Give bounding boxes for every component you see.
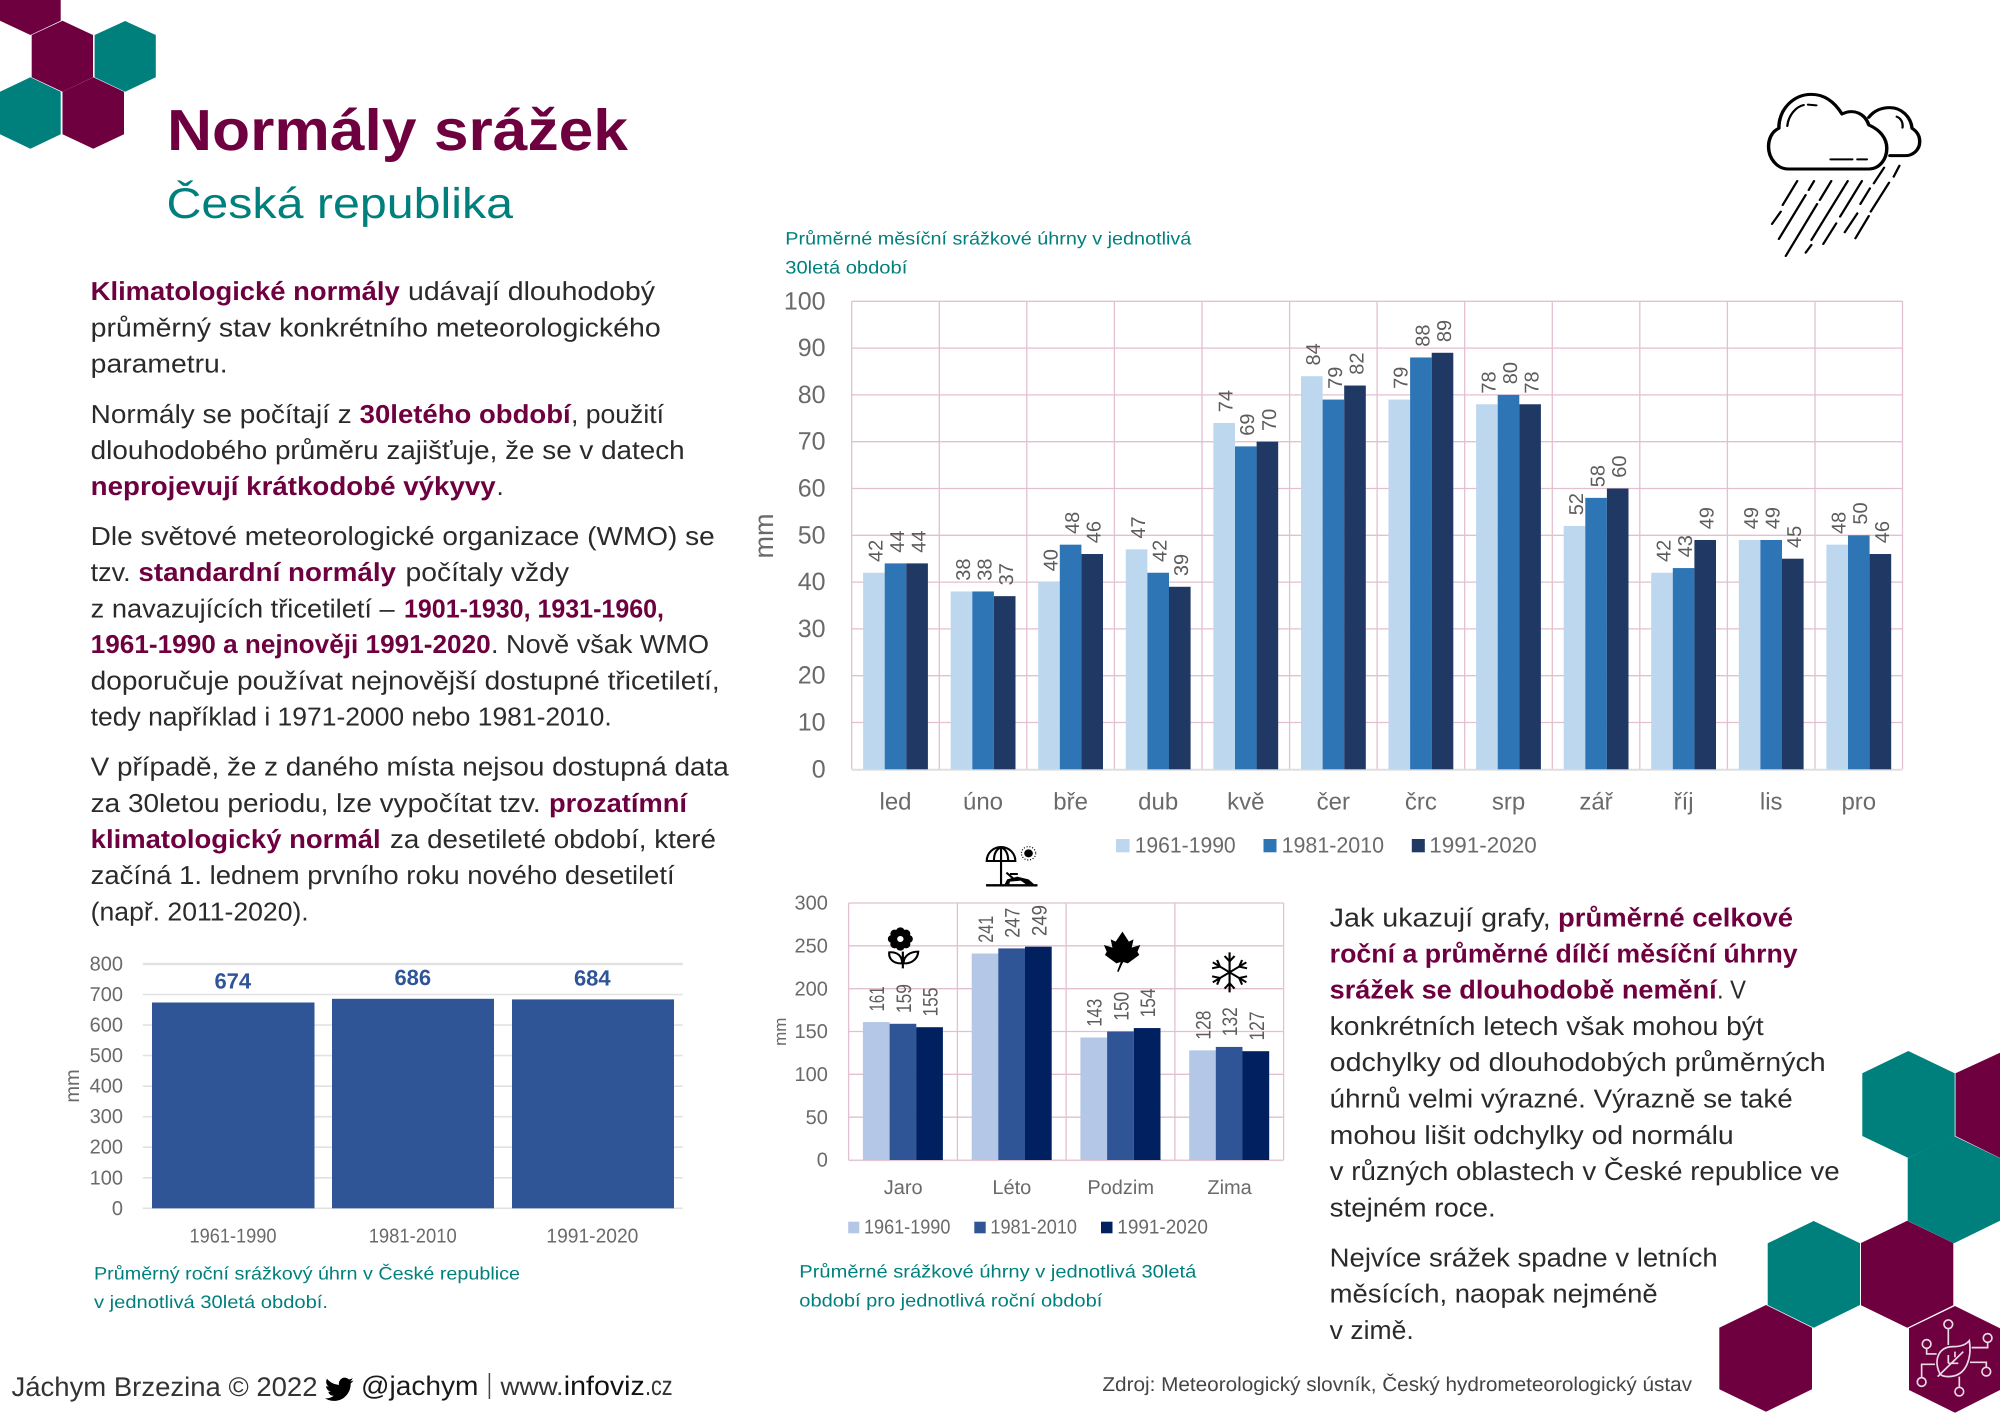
y axis: 600 (90, 1015, 123, 1037)
text block: left column: doporučuje používat nejnovější dostupné třicetiletí, (91, 665, 720, 695)
bars (152, 999, 674, 1208)
data labels: 38 (953, 559, 975, 581)
y axis: 70 (798, 428, 826, 456)
data labels: 155 (920, 988, 942, 1016)
data labels: 48 (1829, 512, 1851, 534)
data labels: 159 (893, 984, 916, 1013)
bar chart: seasonal precipitation (771, 847, 1284, 1238)
x axis: seasons: Podzim (1087, 1177, 1154, 1199)
text block: left column: tzv. (91, 557, 131, 587)
caption: monthly chart: 30letá období (785, 257, 907, 277)
data labels: 79 (1391, 367, 1413, 389)
text block: left column: z navazujících třicetiletí – (91, 593, 395, 623)
footer: author: .cz (645, 1371, 673, 1401)
y axis: 60 (798, 474, 826, 502)
text block: left column: . Nově však WMO (491, 629, 709, 659)
text block: right column: stejném roce. (1330, 1193, 1496, 1223)
y axis: 300 (90, 1106, 123, 1128)
data labels: 48 (1062, 512, 1084, 534)
x axis: months: říj (1674, 788, 1694, 815)
data labels: 46 (1084, 521, 1106, 543)
title: Normály srážek (167, 98, 629, 163)
data labels: 79 (1325, 367, 1347, 389)
data labels: 82 (1346, 353, 1368, 375)
y axis: 0 (817, 1150, 828, 1172)
bars: 1981-2010 (890, 948, 1242, 1160)
icon: twitter bird (325, 1378, 354, 1401)
data labels: 46 (1872, 521, 1894, 543)
y axis: 300 (795, 893, 828, 915)
text block: left column: Normály se počítají z (91, 399, 352, 429)
bars: 1991-2020 (916, 947, 1269, 1160)
icon: leaf with circuit nodes (1917, 1320, 1992, 1396)
icon: snowflake (1212, 952, 1247, 992)
y axis: 200 (90, 1137, 123, 1159)
text block: left column: 1961-1990 a nejnověji 1991-2020 (91, 629, 491, 659)
x axis: months: pro (1841, 788, 1876, 815)
decorative hexagons: top left (0, 0, 156, 149)
y axis: 40 (798, 568, 826, 596)
data labels: 150 (1110, 992, 1133, 1021)
text block: right column (1330, 903, 1840, 1345)
text block: left column: klimatologický normál (91, 824, 381, 854)
legend (1116, 832, 1537, 857)
y axis: 50 (798, 521, 826, 549)
legend: 1991-2020 (1429, 832, 1537, 857)
x axis: months: kvě (1227, 788, 1264, 815)
icon: beach umbrella and sun (986, 847, 1037, 885)
data labels: 249 (1028, 905, 1051, 936)
text block: left column: za desetileté období, které (390, 824, 716, 854)
x axis: 1961-1990 (190, 1226, 276, 1248)
subtitle: Česká republika (166, 180, 513, 228)
bar chart: monthly precipitation (749, 287, 1902, 857)
y axis: mm (771, 1018, 790, 1046)
data labels: 127 (1246, 1012, 1269, 1040)
data labels: 69 (1237, 413, 1259, 436)
y axis: 30 (798, 615, 826, 643)
text block: right column: průměrné celkové (1558, 903, 1793, 933)
y axis: 200 (795, 978, 828, 1000)
text block: left column: parametru. (91, 349, 228, 379)
text block: left column: neprojevují krátkodobé výkyvy (91, 471, 496, 501)
data labels: 132 (1219, 1007, 1242, 1036)
legend: 1961-1990 (864, 1216, 950, 1238)
y axis: 90 (798, 334, 826, 362)
icon: cloud with rain (1769, 94, 1920, 256)
text block: right column: Jak ukazují grafy, (1330, 903, 1551, 933)
text block: left column: (např. 2011-2020). (91, 897, 309, 927)
text block: left column: , použití (571, 399, 665, 429)
footer: author (12, 1371, 673, 1402)
data labels: 161 (866, 986, 889, 1011)
data labels: 42 (865, 540, 887, 562)
text block: right column: úhrnů velmi výrazné. Výrazně se také (1330, 1083, 1793, 1113)
y axis: 80 (798, 381, 826, 409)
data labels: 60 (1609, 456, 1631, 478)
text block: left column: . (496, 471, 504, 501)
text block: left column: Klimatologické normály (91, 276, 400, 306)
data labels (866, 905, 1269, 1040)
x axis: months: čer (1317, 788, 1350, 815)
bars: 1981-2010 (885, 357, 1870, 769)
caption: annual chart: v jednotlivá 30letá období. (94, 1292, 328, 1312)
text block: left column: dlouhodobého průměru zajišťuje, že se v datech (91, 435, 685, 465)
data labels: 78 (1522, 371, 1544, 394)
footer: author: infoviz (564, 1371, 645, 1401)
text block: left column: Dle světové meteorologické organizace (WMO) se (91, 521, 715, 551)
y axis: 50 (806, 1107, 828, 1129)
bars: 1991-2020 (906, 353, 1891, 769)
icon: maple leaf (1104, 932, 1140, 972)
value labels: 674 (214, 969, 252, 994)
data labels: 49 (1741, 507, 1763, 529)
x axis: months: srp (1492, 788, 1525, 815)
data labels: 52 (1566, 493, 1588, 515)
bar chart: annual precipitation (62, 954, 683, 1248)
caption: annual chart (94, 1263, 520, 1312)
caption: seasonal chart: období pro jednotlivá roční období (799, 1291, 1102, 1311)
x axis: months: lis (1760, 788, 1783, 815)
text block: left column: začíná 1. lednem prvního roku nového desetiletí (91, 860, 676, 890)
text block: left column: tedy například i 1971-2000 nebo 1981-2010. (91, 702, 612, 732)
data labels: 84 (1303, 343, 1325, 366)
x axis: seasons: Zima (1207, 1177, 1253, 1199)
data labels: 143 (1084, 999, 1107, 1027)
text block: right column: měsících, naopak nejméně (1330, 1279, 1658, 1309)
y axis: 10 (798, 708, 826, 736)
x axis: seasons: Jaro (884, 1177, 923, 1199)
x axis: months: úno (963, 788, 1003, 815)
footer: author: @jachym (361, 1371, 478, 1401)
text block: left column: za 30letou periodu, lze vypočítat tzv. (91, 788, 541, 818)
data labels: 70 (1259, 409, 1281, 431)
data labels: 128 (1192, 1011, 1216, 1040)
data labels: 78 (1478, 371, 1500, 394)
data labels: 44 (908, 530, 930, 553)
value labels: 684 (574, 965, 611, 990)
legend: 1981-2010 (990, 1216, 1077, 1238)
x axis: 1981-2010 (369, 1226, 457, 1248)
data labels: 45 (1784, 526, 1806, 548)
y axis: 150 (795, 1021, 828, 1043)
y axis: 100 (90, 1167, 123, 1189)
text block: left column: V případě, že z daného místa nejsou dostupná data (91, 752, 729, 782)
y axis: 0 (812, 755, 826, 783)
data labels: 80 (1500, 362, 1522, 384)
data labels: 42 (1150, 540, 1172, 562)
data labels: 42 (1653, 540, 1675, 562)
bars: 1961-1990 (863, 376, 1848, 769)
y axis: 700 (90, 984, 123, 1006)
y axis (749, 287, 826, 783)
value labels: 686 (394, 965, 431, 990)
y axis: 800 (90, 954, 123, 976)
x axis: months: črc (1405, 788, 1437, 815)
caption: monthly chart: Průměrné měsíční srážkové úhrny v jednotlivá (785, 228, 1192, 248)
footer: source: Zdroj: Meteorologický slovník, Český hydrometeorologický ústav (1102, 1373, 1692, 1396)
text block: left column: 30letého období (360, 399, 572, 429)
text block: right column: . V (1717, 975, 1747, 1005)
data labels: 49 (1697, 507, 1719, 529)
text block: left column: udávají dlouhodobý (408, 276, 655, 306)
data labels: 154 (1137, 988, 1160, 1017)
data labels: 247 (1002, 908, 1025, 938)
data labels: 38 (974, 559, 996, 581)
x axis: seasons (884, 1177, 1253, 1199)
text block: left column: průměrný stav konkrétního meteorologického (91, 313, 661, 343)
legend: 1961-1990 (1135, 832, 1236, 857)
footer: author: www. (499, 1373, 564, 1401)
data labels: 88 (1412, 325, 1434, 347)
legend (848, 1216, 1208, 1238)
y axis: 100 (784, 287, 826, 315)
x axis: months: led (879, 788, 912, 815)
text block: right column: roční a průměrné dílčí měsíční úhrny (1330, 939, 1798, 969)
caption: seasonal chart (799, 1262, 1197, 1311)
data labels: 43 (1675, 535, 1697, 557)
data labels: 49 (1763, 507, 1785, 529)
text block: right column: Nejvíce srážek spadne v letních (1330, 1243, 1718, 1273)
text block: right column: v zimě. (1330, 1315, 1414, 1345)
data labels: 39 (1171, 554, 1193, 576)
value labels (214, 965, 611, 994)
y axis: mm (749, 514, 779, 558)
data labels: 74 (1216, 390, 1238, 412)
caption: seasonal chart: Průměrné srážkové úhrny v jednotlivá 30letá (799, 1262, 1197, 1282)
text block: right column: srážek se dlouhodobě nemění (1330, 975, 1718, 1005)
y axis (62, 954, 123, 1220)
x axis: 1991-2020 (546, 1226, 638, 1248)
caption: monthly chart (785, 228, 1192, 277)
y axis (771, 893, 828, 1172)
text block: left column (91, 276, 729, 927)
decorative hexagons: bottom right (1719, 1051, 2000, 1413)
text block: right column: v různých oblastech v České republice ve (1330, 1156, 1840, 1186)
data labels (865, 320, 1894, 585)
y axis: mm (62, 1069, 84, 1103)
y axis: 20 (798, 662, 826, 690)
text block: left column: 1901-1930, 1931-1960, (404, 593, 664, 623)
legend: 1991-2020 (1117, 1216, 1208, 1238)
data labels: 47 (1128, 516, 1150, 539)
y axis: 100 (795, 1064, 828, 1086)
footer: author: Jáchym Brzezina © 2022 (12, 1372, 318, 1402)
x axis: months: bře (1053, 788, 1088, 815)
data labels: 241 (975, 916, 998, 943)
icon: flower (888, 927, 918, 968)
x axis: months: zář (1579, 788, 1614, 815)
y axis: 400 (90, 1076, 123, 1098)
text block: left column: prozatímní (549, 788, 688, 818)
text block: right column: konkrétních letech však mohou být (1330, 1011, 1765, 1041)
data labels: 89 (1434, 320, 1456, 342)
text block: left column: počítaly vždy (406, 557, 569, 587)
x axis: months (879, 788, 1876, 815)
text block: right column: mohou lišit odchylky od normálu (1330, 1120, 1734, 1150)
data labels: 58 (1588, 465, 1610, 487)
y axis: 500 (90, 1045, 123, 1067)
x axis: months: dub (1138, 788, 1178, 815)
legend: 1981-2010 (1282, 832, 1384, 857)
data labels: 37 (996, 563, 1018, 585)
x axis: seasons: Léto (992, 1177, 1031, 1199)
caption: annual chart: Průměrný roční srážkový úhrn v České republice (94, 1263, 520, 1283)
data labels: 44 (887, 530, 909, 553)
y axis: 0 (112, 1198, 123, 1220)
data labels: 40 (1040, 549, 1062, 571)
y axis: 250 (795, 936, 828, 958)
text block: left column: standardní normály (138, 557, 397, 587)
x axis (190, 1226, 638, 1248)
text block: right column: odchylky od dlouhodobých průměrných (1330, 1047, 1826, 1077)
data labels: 50 (1850, 502, 1872, 525)
bars: 1961-1990 (863, 954, 1216, 1160)
